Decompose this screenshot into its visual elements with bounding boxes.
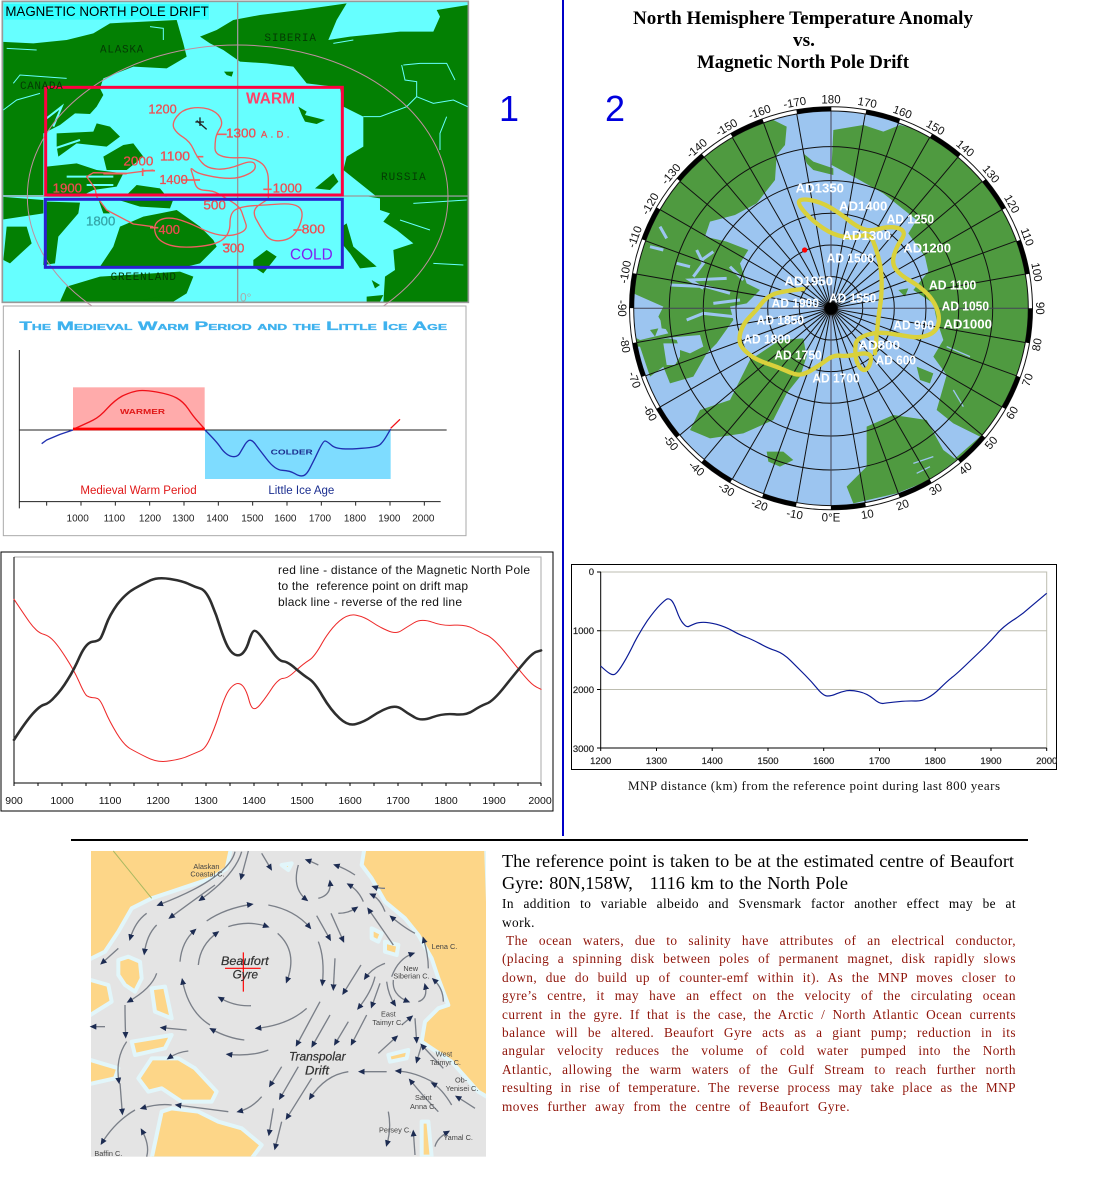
- current labels: Taimyr C.: [430, 1058, 461, 1067]
- paragraph line: resulting in rise of temperature. The reverse process may take place as the MNP: [502, 1080, 1016, 1095]
- chart title: The Medieval Warm Period and the Little Ice Age: [19, 319, 448, 333]
- year axis labels: 1600: [338, 795, 362, 807]
- title: North Hemisphere Temperature Anomaly: [633, 9, 974, 29]
- drift year labels: AD 1850: [757, 312, 804, 327]
- year axis labels: 1800: [925, 756, 946, 767]
- year axis labels: 1600: [274, 514, 297, 525]
- paragraph line: current in the gyre. If that is the case, the Arctic / North Atlantic Ocean currents: [502, 1007, 1016, 1022]
- distance axis labels: 1000: [573, 626, 594, 637]
- year axis labels: 1900: [980, 756, 1002, 767]
- distance axis labels: 0: [589, 567, 594, 578]
- polar longitude labels: [615, 94, 1045, 524]
- year labels on drift: 1000: [273, 182, 302, 196]
- year axis labels: 1700: [309, 514, 332, 525]
- current labels: Saint: [415, 1093, 432, 1102]
- colder label: COLDER: [271, 449, 313, 456]
- polar longitude labels: -150: [714, 117, 740, 139]
- polar longitude labels: 70: [1021, 372, 1036, 388]
- panel: Beaufort Gyre currents map: [85, 845, 495, 1158]
- polar longitude labels: -70: [625, 370, 642, 390]
- polar longitude labels: -100: [618, 260, 634, 285]
- vertical divider: [562, 0, 564, 836]
- polar longitude labels: -170: [782, 96, 807, 111]
- polar longitude labels: 170: [857, 96, 878, 111]
- title: vs.: [793, 31, 815, 51]
- year axis labels: 2000: [528, 795, 552, 807]
- graticule: [3, 3, 468, 348]
- region labels: CANADA: [20, 81, 63, 93]
- colder band: [205, 430, 391, 479]
- icon: reference point: [802, 247, 807, 253]
- year axis labels: 1300: [194, 795, 218, 807]
- curves: [14, 578, 541, 761]
- year axis labels: 1200: [590, 756, 611, 767]
- year axis labels: 900: [5, 795, 23, 807]
- year axis labels: [5, 795, 552, 807]
- polar longitude labels: -20: [749, 497, 769, 514]
- warm zone box: [46, 87, 342, 195]
- current labels: Coastal C.: [190, 870, 225, 879]
- polar longitude labels: -80: [617, 336, 632, 354]
- panel number 1: 1: [499, 88, 519, 129]
- green boundary line: [113, 851, 152, 898]
- year axis labels: 1200: [139, 514, 162, 525]
- paragraph line: gyre’s centre, it may have an effect on the velocity of the circulating ocean: [502, 988, 1016, 1003]
- polar graticule: [630, 107, 1032, 510]
- intro line two: work.: [502, 915, 535, 930]
- year labels on drift: 800: [302, 222, 325, 236]
- polar longitude labels: -110: [626, 225, 645, 250]
- year labels on drift: 2000: [123, 155, 153, 169]
- drift year labels: AD 1050: [942, 299, 989, 314]
- year axis labels: 1900: [378, 514, 401, 525]
- drift year labels: AD 1750: [774, 347, 822, 362]
- current labels: Siberian C.: [393, 971, 430, 980]
- polar longitude labels: 160: [891, 104, 913, 122]
- year axis labels: 1100: [99, 795, 121, 807]
- panel: distance and reverse line chart: [1, 552, 553, 811]
- polar longitude labels: -60: [640, 403, 658, 423]
- year labels on drift: A.D.: [261, 130, 289, 140]
- map land: [85, 845, 495, 1158]
- current labels: East: [381, 1010, 396, 1019]
- panel: magnetic north pole drift map: [2, 0, 470, 306]
- year axis labels: 1600: [813, 756, 834, 767]
- polar drift track and labels: [739, 181, 992, 386]
- drift year labels: [743, 181, 992, 386]
- polar longitude labels: -130: [660, 162, 684, 187]
- year axis labels: 1500: [757, 756, 779, 767]
- current labels: Ob-: [455, 1075, 468, 1084]
- little ice age label: Little Ice Age: [268, 483, 335, 497]
- drift year labels: AD800: [858, 337, 900, 352]
- year axis labels: 1500: [290, 795, 314, 807]
- year axis labels: 2000: [1036, 756, 1057, 767]
- current labels: Drift: [305, 1063, 330, 1077]
- year axis labels: 1300: [646, 756, 667, 767]
- distance axis labels: [573, 567, 594, 755]
- year axis labels: 1100: [104, 514, 126, 525]
- cold zone box: [45, 199, 342, 267]
- year axis labels: 1800: [434, 795, 458, 807]
- year axis labels: 1800: [344, 514, 367, 525]
- polar longitude labels: 40: [957, 460, 975, 478]
- current labels: Transpolar: [289, 1050, 347, 1064]
- year axis labels: [67, 514, 435, 525]
- polar map small islands: [650, 320, 666, 336]
- region labels: ALASKA: [100, 45, 144, 57]
- polar longitude labels: 0°E: [822, 512, 841, 524]
- polar longitude labels: 30: [927, 482, 945, 499]
- polar longitude labels: -10: [785, 508, 804, 522]
- region labels: RUSSIA: [381, 172, 426, 184]
- legend text: [278, 563, 530, 609]
- year axis labels: 1400: [206, 514, 229, 525]
- legend text: black line - reverse of the red line: [278, 595, 462, 609]
- current labels: Beaufort: [221, 954, 269, 968]
- current labels: New: [403, 964, 419, 973]
- paragraph line: down, due do build up of counter-emf within it). As the MNP moves closer to: [502, 970, 1016, 985]
- region labels: [20, 33, 426, 284]
- year labels on drift: 1400: [159, 173, 188, 187]
- current labels: Persey C.: [379, 1125, 411, 1134]
- distance curve: [601, 593, 1047, 703]
- year labels on drift: 500: [203, 198, 226, 212]
- polar longitude labels: 100: [1028, 262, 1043, 283]
- drift year labels: AD1950: [784, 274, 833, 289]
- year labels on drift: 1300: [226, 127, 256, 141]
- polar longitude labels: 150: [924, 118, 946, 138]
- plot frame: [14, 557, 541, 783]
- current labels: Baffin C.: [94, 1149, 122, 1158]
- text block: reference point explanation: [502, 851, 1016, 1114]
- polar longitude labels: -120: [640, 191, 662, 217]
- current labels: Alaskan: [193, 862, 219, 871]
- polar longitude labels: -90: [615, 300, 627, 317]
- year axis labels: 1300: [172, 514, 195, 525]
- icon: reference marker: [195, 117, 207, 129]
- polar longitude labels: 10: [860, 508, 875, 522]
- paragraph line: angular velocity reduces the volume of cold water pumped into the North: [502, 1043, 1016, 1058]
- drift year labels: AD1000: [943, 317, 992, 332]
- temperature curve: [42, 391, 400, 476]
- current labels: Yenisei C.: [446, 1084, 478, 1093]
- year axis labels: 2000: [412, 514, 435, 525]
- year axis labels: 1700: [386, 795, 410, 807]
- current labels: Yamal C.: [443, 1133, 473, 1142]
- drift year labels: AD 1500: [827, 251, 874, 266]
- current labels: Lena C.: [432, 942, 457, 951]
- year labels on drift: 1100: [160, 150, 190, 164]
- legend text: red line - distance of the Magnetic North Pole: [278, 563, 530, 577]
- year labels on drift: 300: [223, 241, 244, 255]
- drift year labels: AD1350: [796, 181, 844, 196]
- year labels on drift: 1900: [53, 182, 82, 196]
- drift year labels: AD 1800: [743, 331, 791, 346]
- year labels on drift: 1800: [86, 215, 115, 229]
- drift year labels: AD 1100: [929, 277, 976, 292]
- intro line: In addition to variable albeido and Svensmark factor another effect may be at: [502, 896, 1016, 911]
- axes and ticks: [14, 557, 541, 786]
- polar map sea and land: [634, 112, 1028, 506]
- panel: MNP distance chart: [572, 564, 1057, 793]
- polar longitude labels: 140: [953, 138, 976, 160]
- paragraph line: moves further away from the centre of Beaufort Gyre.: [502, 1099, 850, 1114]
- map title: MAGNETIC NORTH POLE DRIFT: [5, 3, 209, 19]
- distance axis labels: 2000: [573, 685, 594, 696]
- year labels on drift: 1200: [148, 102, 177, 116]
- map rivers and inlets: [3, 27, 468, 265]
- heading line two: Gyre: 80N,158W, 1116 km to the North Pole: [502, 873, 848, 893]
- drift year labels: AD1200: [903, 240, 951, 255]
- panel: polar projection drift map: [618, 95, 1044, 522]
- plot frame and grid: [601, 572, 1047, 748]
- year axis labels: 1400: [702, 756, 723, 767]
- caption: MNP distance (km) from the reference point during last 800 years: [628, 778, 1000, 793]
- polar longitude labels: 90: [1033, 302, 1045, 315]
- warmer band: [73, 387, 205, 430]
- red paragraph: [502, 933, 1016, 1114]
- drift year labels: AD1400: [839, 199, 887, 214]
- yellow drift track: [739, 199, 939, 375]
- polar longitude labels: 80: [1031, 337, 1045, 352]
- drift year labels: AD 1250: [887, 211, 934, 226]
- paragraph line: (placing a spinning disk between poles of permanent magnet, disk rapidly slows: [502, 951, 1016, 966]
- warmer label: WARMER: [120, 407, 166, 416]
- year axis labels: 1900: [482, 795, 506, 807]
- year axis labels: 1700: [869, 756, 890, 767]
- drift year labels: AD 1900: [772, 295, 819, 310]
- paragraph line: The ocean waters, due to salinity have attributes of an electrical conductor,: [506, 933, 1016, 948]
- drift year labels: AD 900: [893, 317, 934, 332]
- red distance line: [14, 599, 541, 761]
- current labels: Gyre: [233, 967, 258, 981]
- year axis labels: [590, 756, 1057, 767]
- polar longitude labels: -40: [686, 459, 706, 479]
- polar longitude labels: 130: [980, 163, 1001, 186]
- polar map archipelago channels: [650, 227, 970, 473]
- medieval warm period label: Medieval Warm Period: [80, 483, 197, 497]
- panel number 2: 2: [605, 88, 625, 129]
- title: Magnetic North Pole Drift: [697, 53, 910, 73]
- polar longitude labels: 20: [895, 498, 911, 513]
- drift year labels: AD1300: [842, 228, 891, 243]
- polar longitude labels: -50: [660, 433, 680, 454]
- distance axis labels: 3000: [573, 744, 594, 755]
- polar longitude labels: 110: [1018, 226, 1035, 248]
- pole drift track: [87, 108, 302, 247]
- polar longitude labels: -160: [747, 103, 773, 122]
- polar longitude labels: 50: [983, 435, 1001, 452]
- map land masses: [0, 3, 468, 303]
- title: [633, 9, 974, 73]
- year axis labels: 1400: [242, 795, 266, 807]
- polar longitude labels: 120: [1001, 193, 1021, 216]
- polar longitude labels: -140: [685, 137, 710, 161]
- polar map inlets: [633, 293, 703, 365]
- polar longitude labels: 60: [1004, 405, 1021, 422]
- cold label: COLD: [290, 246, 333, 263]
- year axis labels: 1200: [146, 795, 170, 807]
- warm label: WARM: [246, 90, 295, 107]
- year labels on drift: 400: [158, 223, 180, 237]
- drift year labels: AD 600: [876, 352, 916, 367]
- drift year labels: AD 1550: [829, 290, 876, 305]
- current labels: West: [436, 1050, 452, 1059]
- reference point cross: [225, 952, 261, 992]
- heading: The reference point is taken to be at the estimated centre of Beaufort: [502, 851, 1014, 871]
- paragraph line: Atlantic, allowing the warm waters of the Gulf Stream to reach further north: [502, 1062, 1016, 1077]
- paragraph line: balance will be altered. Beaufort Gyre acts as a giant pump; reduction in its: [502, 1025, 1016, 1040]
- current labels: Taimyr C.: [372, 1018, 403, 1027]
- zero meridian label: 0°: [240, 291, 252, 305]
- region labels: GREENLAND: [111, 272, 176, 284]
- current arrows: [92, 851, 475, 1157]
- year axis labels: 1500: [241, 514, 264, 525]
- year axis labels: 1000: [67, 514, 89, 525]
- current labels: [94, 862, 478, 1158]
- black reverse line: [14, 578, 541, 740]
- polar longitude labels: 180: [821, 94, 841, 106]
- current labels: Anna C.: [410, 1102, 436, 1111]
- polar longitude labels: -30: [716, 481, 736, 500]
- region labels: SIBERIA: [264, 33, 316, 45]
- drift year labels: AD 1700: [812, 371, 860, 386]
- panel: medieval warm period and little ice age chart: [3, 306, 466, 536]
- horizontal divider: [71, 839, 1028, 841]
- year axis labels: 1000: [50, 795, 74, 807]
- legend text: to the reference point on drift map: [278, 579, 468, 593]
- axes: [19, 350, 447, 508]
- year labels on drift: [53, 102, 325, 255]
- axes: [597, 572, 1047, 751]
